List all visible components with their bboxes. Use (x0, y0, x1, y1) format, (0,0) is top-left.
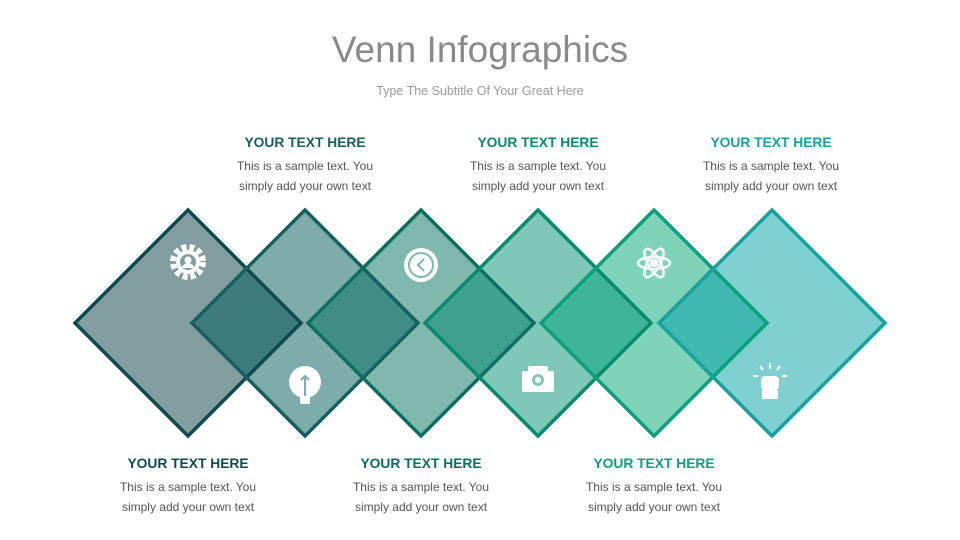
icon: brain bulb (289, 366, 321, 404)
subtitle: Type The Subtitle Of Your Great Here (376, 84, 584, 98)
icon: clock (404, 248, 438, 282)
text block 5: simply add your own text (588, 500, 720, 514)
text block 4: simply add your own text (472, 179, 604, 193)
title: Venn Infographics (332, 29, 628, 70)
icon: fist (753, 363, 787, 399)
text block 4 (470, 135, 606, 193)
text block 6: simply add your own text (705, 179, 837, 193)
text block 3 (353, 456, 489, 514)
icon: camera (522, 366, 554, 392)
text block 1 (120, 456, 256, 514)
text block 1: YOUR TEXT HERE (127, 456, 249, 471)
text block 4: YOUR TEXT HERE (477, 135, 599, 150)
text block 3: simply add your own text (355, 500, 487, 514)
text block 4: This is a sample text. You (470, 159, 606, 173)
text block 6: This is a sample text. You (703, 159, 839, 173)
text block 6: YOUR TEXT HERE (710, 135, 832, 150)
text block 5: This is a sample text. You (586, 480, 722, 494)
icon: atom (638, 246, 670, 280)
text block 6 (703, 135, 839, 193)
text block 3: YOUR TEXT HERE (360, 456, 482, 471)
text block 2: simply add your own text (239, 179, 371, 193)
icon: gear (173, 247, 203, 277)
text block 5 (586, 456, 722, 514)
text block 1: This is a sample text. You (120, 480, 256, 494)
text block 2 (237, 135, 373, 193)
text block 3: This is a sample text. You (353, 480, 489, 494)
text block 2: YOUR TEXT HERE (244, 135, 366, 150)
text block 2: This is a sample text. You (237, 159, 373, 173)
text block 1: simply add your own text (122, 500, 254, 514)
text block 5: YOUR TEXT HERE (593, 456, 715, 471)
